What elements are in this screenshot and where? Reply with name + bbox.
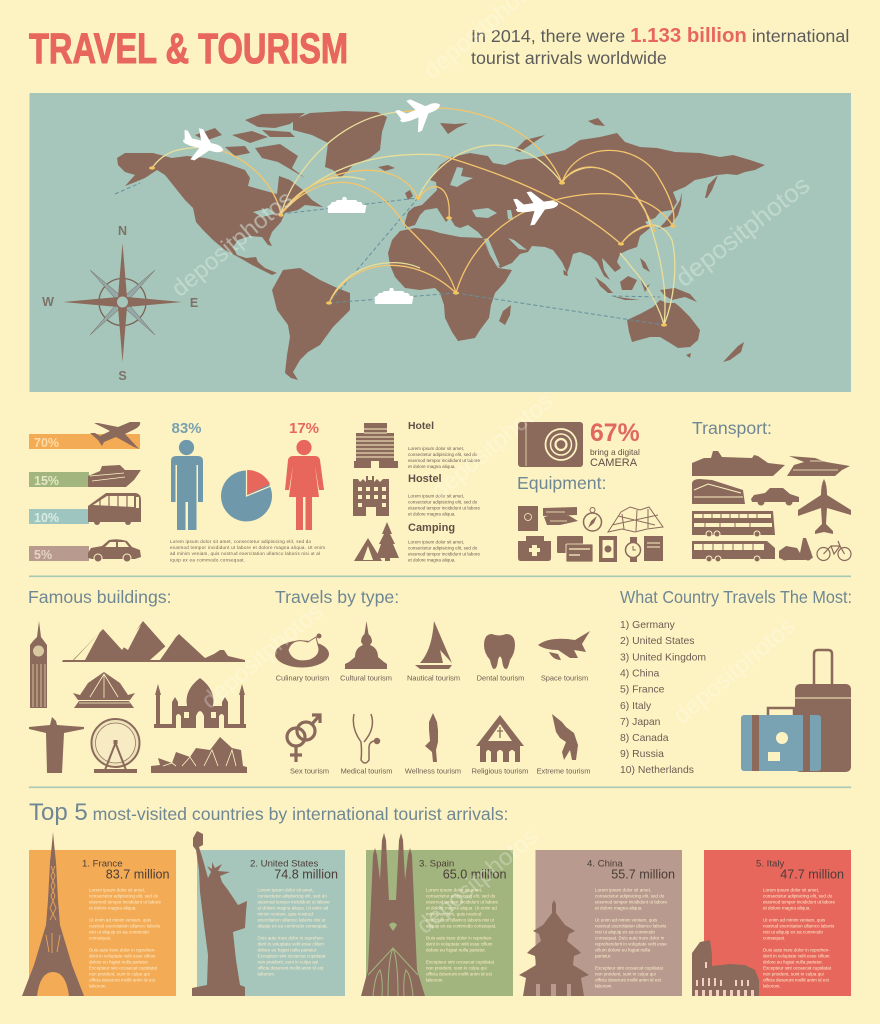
- icon: nautical tourism: [415, 621, 452, 669]
- label: hostel: Hostel: [408, 473, 442, 485]
- country and value: 3. Spain: [419, 858, 454, 870]
- watermarks on map: depositphotos: [167, 186, 298, 303]
- stat: 83% men: 83%: [171, 420, 202, 437]
- text: hostel: eiusmod tempor incididunt ut labore: [408, 506, 481, 510]
- heading: equipment: Equipment:: [517, 473, 606, 493]
- panel: equipment: [517, 420, 663, 562]
- body text: Duis aute irure dolor in reprehen-: [426, 936, 493, 940]
- body text: nisi ut aliquip ex ea commodo: [763, 930, 823, 934]
- icon: space tourism: [538, 631, 590, 660]
- body text: laborum.: [89, 984, 107, 988]
- list: countries that travel the most: [620, 620, 706, 776]
- list: countries that travel the most: 5) France: [620, 684, 665, 696]
- country and value: [82, 858, 170, 882]
- caption: bring a digital camera: [590, 447, 640, 469]
- panel: france: [22, 832, 176, 996]
- map ocean: [30, 93, 851, 392]
- heading: what country travels the most: What Country Travels The Most:: [620, 587, 852, 607]
- card: [366, 850, 513, 996]
- icon: lotus temple: [73, 672, 135, 708]
- panel: china: [519, 850, 682, 996]
- text: hostel: [408, 494, 481, 516]
- body text: non proident, sunt in culpa qui: [258, 960, 318, 964]
- caption: bring a digital camera: CAMERA: [590, 457, 638, 469]
- route markers: [149, 166, 676, 327]
- body text: Duis aute irure dolor in reprehen-: [763, 948, 830, 952]
- body text: et dolore magna aliqua.: [763, 906, 811, 910]
- icon: camera: [518, 422, 583, 467]
- icon: blue suitcase: [741, 708, 821, 771]
- label: hotel: Hotel: [408, 421, 434, 432]
- body text: consectetur adipisicing elit, sed do: [258, 894, 327, 898]
- body text: reprehenderit in voluptate velit esse: [595, 942, 667, 946]
- body text: aliquip ex ea commodo consequat.: [258, 924, 328, 928]
- divider: [29, 576, 851, 577]
- body text: nostrud exercitation ullamco laboris: [595, 924, 667, 928]
- monument: statue of liberty: [192, 831, 247, 996]
- body text: derit in voluptate velit esse cillum: [426, 942, 493, 946]
- icon: hostel: [353, 476, 389, 516]
- monument: sagrada familia: [361, 833, 425, 996]
- body text: [595, 888, 668, 988]
- text: hotel: Lorem ipsum dolor sit amet,: [408, 446, 464, 451]
- body text: eiusmod tempor incididunt ut labore: [763, 900, 836, 904]
- monument: eiffel tower: [22, 832, 84, 996]
- body text: Excepteur sint occaecat cupidatat: [258, 954, 326, 958]
- body text: non proident, sunt in culpa qui: [89, 972, 150, 976]
- country and value: 74.8 million: [274, 868, 338, 882]
- icon: camping: [354, 522, 399, 561]
- paragraph: ad minim veniam, quis nostrud exercitation ullamco laboris nisi ut al: [170, 551, 320, 556]
- country and value: [587, 858, 675, 882]
- body text: laborum.: [258, 972, 275, 976]
- body text: [89, 888, 162, 988]
- paragraph: Lorem ipsum dolor sit amet, consectetur adipisicing elit, sed do: [170, 539, 311, 544]
- card: [704, 850, 851, 996]
- watermarks on page: depositphotos: [197, 598, 328, 715]
- body text: minim veniam, quis nostrud: [258, 912, 313, 916]
- list: countries that travel the most: 4) China: [620, 668, 659, 680]
- text: hostel: et dolore magna aliqua.: [408, 512, 456, 516]
- icon: man: [171, 440, 203, 530]
- body text: consectetur adipisicing elit, sed do: [763, 894, 833, 898]
- body text: Lorem ipsum dolor sit amet,: [258, 888, 314, 892]
- icon: hotel: [354, 423, 398, 468]
- body text: et dolore magna aliqua.: [89, 906, 137, 910]
- body text: et dolore magna aliqua. Ut enim ad: [426, 906, 497, 910]
- country and value: [756, 858, 844, 882]
- monument: colosseum: [692, 940, 759, 996]
- label: dental tourism: Dental tourism: [477, 674, 524, 682]
- label: cultural tourism: Cultural tourism: [340, 674, 392, 682]
- paragraph: [170, 539, 325, 562]
- icon: woman: [285, 440, 324, 530]
- body text: non proident, sunt in culpa qui: [595, 972, 656, 976]
- body text: Duis aute irure dolor in reprehen-: [258, 936, 325, 940]
- panel: italy: [692, 850, 851, 996]
- body text: eiusmod tempor incididunt ut labore: [595, 900, 668, 904]
- body text: eiusmod tempor incididunt ut labore: [89, 900, 162, 904]
- heading: travels by type: Travels by type:: [275, 587, 399, 607]
- icon: big ben: [30, 621, 47, 708]
- list: countries that travel the most: 2) United States: [620, 636, 695, 647]
- body text: dolore eu fugiat nulla pariatur.: [426, 948, 486, 952]
- body text: [258, 888, 330, 976]
- icon: religious tourism: [476, 715, 524, 762]
- body text: pariatur.: [595, 954, 611, 958]
- body text: dolore eu fugiat nulla pariatur.: [89, 960, 149, 964]
- icons: white ships: [328, 197, 414, 304]
- panel: spain: [361, 833, 513, 996]
- body text: officia deserunt mollit anim id est: [426, 972, 493, 976]
- body text: consectetur adipisicing elit, sed do: [89, 894, 159, 898]
- paragraph: eiusmod tempor incididunt ut labore et dolore magna aliqua. Ut enim: [170, 545, 325, 550]
- body text: officia deserunt mollit anim id est: [89, 978, 156, 982]
- panel: famous buildings: [29, 621, 247, 773]
- list: countries that travel the most: 9) Russia: [620, 749, 664, 760]
- body text: Lorem ipsum dolor sit amet,: [595, 888, 651, 892]
- body text: consectetur adipisicing elit, sed do: [595, 894, 665, 898]
- icon: sex tourism: [287, 715, 320, 762]
- country and value: 47.7 million: [780, 868, 844, 882]
- body text: Ut enim ad minim veniam, quis: [763, 918, 826, 922]
- text: camping: Lorem ipsum dolor sit amet,: [408, 540, 464, 544]
- panel: transport share bars: [29, 422, 141, 562]
- pie chart: [221, 470, 272, 522]
- body text: eiusmod tempor incididunt ut labore: [426, 900, 499, 904]
- body text: Excepteur sint occaecat cupidatat: [426, 960, 495, 964]
- icon: dental tourism: [484, 634, 515, 669]
- text: camping: et dolore magna aliqua.: [408, 558, 456, 562]
- list: countries that travel the most: 1) Germany: [620, 620, 676, 631]
- body text: consequat.: [89, 936, 111, 940]
- body text: dolore eu fugiat nulla pariatur.: [258, 948, 317, 952]
- label: camping: Camping: [408, 522, 455, 534]
- icon: cultural tourism: [345, 621, 387, 669]
- watermarks on map: depositphotos: [669, 169, 815, 293]
- icon: taj mahal: [154, 678, 246, 728]
- body text: nisi ut aliquip ex ea commodo: [595, 930, 655, 934]
- label: nautical tourism: Nautical tourism: [407, 674, 460, 682]
- icons: white planes: [178, 90, 561, 227]
- body text: officia deserunt mollit anim id est: [763, 978, 830, 982]
- body text: Lorem ipsum dolor sit amet,: [763, 888, 819, 892]
- panel: united states: [192, 831, 345, 996]
- label: medical tourism: Medical tourism: [341, 766, 392, 776]
- panel: travels by type: [275, 621, 590, 776]
- list: countries that travel the most: 8) Canada: [620, 733, 669, 744]
- bar: 10% bus: 10%: [34, 511, 59, 525]
- body text: Lorem ipsum dolor sit amet,: [426, 888, 482, 892]
- paragraph: iquip ex ea commodo consequat.: [170, 558, 245, 562]
- icon: extreme tourism: [552, 714, 578, 760]
- country and value: 5. Italy: [756, 858, 784, 870]
- text: hostel: consectetur adipisicing elit, sed do: [408, 500, 478, 504]
- body text: derit in voluptate velit esse cillum: [258, 942, 324, 946]
- body text: Ut enim ad minim veniam, quis: [89, 918, 152, 922]
- panel: gender split: [170, 420, 325, 562]
- body text: cillum dolore eu fugiat nulla: [595, 948, 651, 952]
- icon: sydney opera house: [151, 737, 247, 773]
- icons: equipment: [518, 506, 663, 562]
- icon: london eye: [92, 719, 140, 773]
- icon: compass rose: E: [190, 296, 198, 310]
- label: space tourism: Space tourism: [541, 674, 588, 682]
- label: culinary tourism: Culinary tourism: [276, 674, 329, 682]
- body text: consectetur adipisicing elit, sed do: [426, 894, 496, 898]
- body text: exercitation ullamco laboris nisi ut: [258, 918, 326, 922]
- text: hotel: eiusmod tempor incididunt ut labore: [408, 458, 481, 463]
- icons: transport: [692, 451, 851, 562]
- bar: 70% plane: 70%: [34, 436, 59, 450]
- panel: world map: [30, 90, 851, 392]
- title: TRAVEL & TOURISM: [29, 25, 348, 73]
- body text: non proident, sunt in culpa qui: [763, 972, 824, 976]
- list: countries that travel the most: 7) Japan: [620, 717, 661, 728]
- sea routes: [115, 183, 664, 325]
- heading: top 5: Top 5 most-visited countries by international tourist arrivals:: [29, 799, 508, 826]
- watermarks on page: depositphotos: [427, 388, 558, 505]
- text: hostel: Lorem ipsum dolor sit amet,: [408, 494, 464, 498]
- watermarks on page: depositphotos: [412, 823, 543, 940]
- text: hotel: et dolore magna aliqua.: [408, 464, 456, 469]
- icon: brown suitcase: [795, 650, 851, 772]
- country and value: 1. France: [82, 858, 123, 870]
- body text: exercitation ullamco laboris nisi ut: [426, 918, 495, 922]
- body text: consequat.: [763, 936, 785, 940]
- heading: famous buildings: Famous buildings:: [28, 587, 172, 607]
- caption: bring a digital camera: bring a digital: [590, 447, 640, 457]
- body text: laborum.: [763, 984, 781, 988]
- icon: compass rose: W: [42, 295, 54, 309]
- body text: nisi ut aliquip ex ea commodo: [89, 930, 149, 934]
- icon: compass rose: S: [118, 369, 127, 383]
- body text: [426, 888, 499, 982]
- monument: temple of heaven: [519, 900, 589, 996]
- heading: transport: Transport:: [692, 418, 772, 438]
- icon: pyramids and sphinx: [62, 621, 245, 662]
- label: extreme tourism: Extreme tourism: [537, 766, 590, 776]
- body text: laborum.: [426, 978, 444, 982]
- flight routes: [152, 108, 675, 325]
- country and value: 55.7 million: [611, 868, 675, 882]
- text: camping: consectetur adipisicing elit, sed do: [408, 546, 478, 550]
- text: hotel: [408, 446, 481, 469]
- body text: Duis aute irure dolor in reprehen-: [89, 948, 156, 952]
- body text: minim veniam, quis nostrud: [426, 912, 482, 916]
- body text: derit in voluptate velit esse cillum: [89, 954, 156, 958]
- body text: Excepteur sint occaecat cupidatat: [89, 966, 158, 970]
- body text: Lorem ipsum dolor sit amet,: [89, 888, 145, 892]
- card: [197, 850, 345, 996]
- body text: officia deserunt mollit anim id est: [258, 966, 324, 970]
- headline statistic: [471, 25, 849, 68]
- body text: consequat. Duis aute irure dolor in: [595, 936, 665, 940]
- country and value: [419, 858, 506, 882]
- panel: transport: [692, 418, 851, 562]
- body text: Excepteur sint occaecat cupidatat: [763, 966, 832, 970]
- body text: non proident, sunt in culpa qui: [426, 966, 487, 970]
- body text: Excepteur sint occaecat cupidatat: [595, 966, 664, 970]
- stat: 17% women: 17%: [289, 420, 319, 437]
- text: camping: [408, 540, 481, 562]
- icon: christ the redeemer: [29, 717, 84, 773]
- body text: laborum.: [595, 984, 613, 988]
- map landmasses: [117, 111, 765, 380]
- headline statistic: In 2014, there were 1.133 billion international: [471, 25, 849, 47]
- icon: compass rose: [42, 224, 198, 383]
- inland seas: [253, 167, 527, 266]
- icon: medical tourism: [353, 714, 380, 763]
- headline statistic: tourist arrivals worldwide: [471, 48, 667, 68]
- country and value: [250, 858, 338, 882]
- list: countries that travel the most: 3) United Kingdom: [620, 652, 706, 664]
- country and value: 83.7 million: [106, 868, 170, 882]
- bar: 5% car: 5%: [34, 548, 52, 562]
- country and value: 65.0 million: [443, 868, 506, 882]
- body text: Ut enim ad minim veniam, quis: [595, 918, 658, 922]
- bar: 15% ship: 15%: [34, 474, 59, 488]
- text: camping: eiusmod tempor incididunt ut labore: [408, 552, 481, 556]
- body text: nostrud exercitation ullamco laboris: [763, 924, 835, 928]
- stat: 67%: 67%: [590, 420, 640, 447]
- watermarks on page: [197, 0, 800, 940]
- body text: nostrud exercitation ullamco laboris: [89, 924, 161, 928]
- body text: [763, 888, 836, 988]
- body text: aliquip ex ea commodo consequat.: [426, 924, 496, 928]
- body text: eiusmod tempor incididunt ut labore: [258, 900, 330, 904]
- body text: officia deserunt mollit anim id est: [595, 978, 662, 982]
- label: wellness tourism: Wellness tourism: [405, 766, 461, 776]
- list: countries that travel the most: 10) Netherlands: [620, 765, 694, 776]
- text: hotel: consectetur adipisicing elit, sed do: [408, 452, 478, 457]
- list: countries that travel the most: 6) Italy: [620, 701, 652, 712]
- divider: [29, 786, 851, 788]
- card: [536, 850, 682, 996]
- watermarks on page: depositphotos: [669, 613, 800, 730]
- panel: accommodation: [353, 421, 481, 562]
- label: religious tourism: Religious tourism: [472, 766, 528, 776]
- body text: dolore eu fugiat nulla pariatur.: [763, 960, 823, 964]
- watermarks on map: [167, 169, 815, 303]
- label: sex tourism: Sex tourism: [290, 766, 329, 776]
- icon: culinary tourism: [275, 634, 329, 668]
- icon: wellness tourism: [425, 713, 438, 762]
- body text: et dolore magna aliqua.: [595, 906, 643, 910]
- body text: et dolore magna aliqua. Ut enim ad: [258, 906, 329, 910]
- icon: compass rose: N: [118, 224, 127, 238]
- body text: derit in voluptate velit esse cillum: [763, 954, 830, 958]
- card: [29, 850, 176, 996]
- country and value: 4. China: [587, 858, 623, 870]
- country and value: 2. United States: [250, 858, 318, 870]
